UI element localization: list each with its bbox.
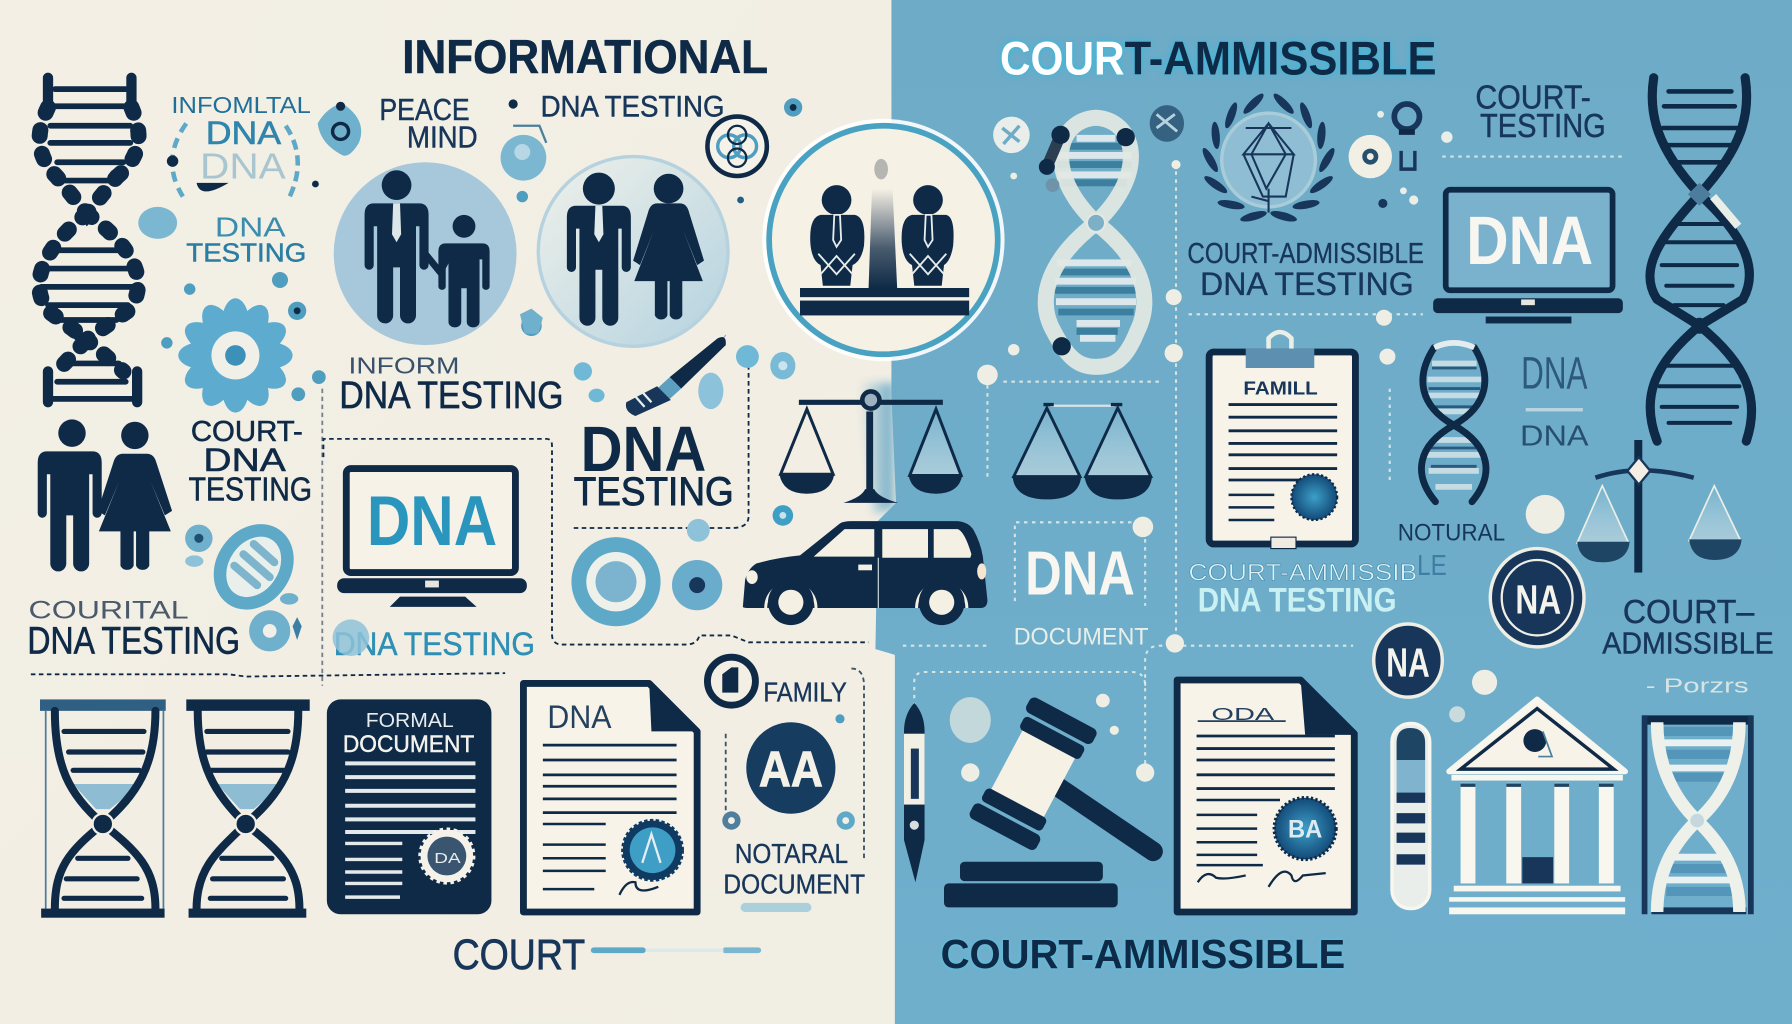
text: court-admissible right: ADMISSIBLE: [1602, 626, 1774, 661]
icon: laptop with DNA: DNA: [1466, 202, 1593, 279]
icon: balance scale right-center: [1013, 405, 1152, 499]
icon: pale DNA helix: [1039, 118, 1144, 367]
text: DNA outline labels: [1520, 348, 1589, 453]
icon: balance scale right: [1577, 440, 1742, 573]
text: DNA document panel: DNA: [1025, 539, 1135, 608]
icon: DNA document: DNA: [547, 699, 612, 735]
connector lines: court-admissible side: [903, 157, 1623, 771]
icon: gavel: [944, 695, 1153, 907]
text: notaral document: [723, 838, 865, 912]
text block: informal DNA testing: INFOMLTAL: [171, 92, 311, 118]
text: DNA outline labels: DNA: [1521, 348, 1588, 399]
icon: molecule badge: [707, 117, 767, 176]
text: court DNA testing: COURT-: [191, 416, 303, 448]
title: court-admissible: T-AMMISSIBLE: [1125, 32, 1437, 84]
text: court testing: COURT-: [1475, 80, 1591, 117]
icon: eye badge: [1349, 104, 1453, 208]
icon: pale hourglass helix right: [1642, 715, 1752, 914]
icon: large DNA helix left: [39, 78, 139, 402]
icon: hourglass helix 2: [186, 699, 310, 918]
text: DNA outline labels: DNA: [1520, 421, 1589, 453]
icon: legal document right: [1177, 679, 1357, 912]
text: court testing: TESTING: [1480, 108, 1606, 145]
text: court-admissible DNA testing: [1187, 238, 1424, 302]
icon: family badge with text: FAMILY: [763, 677, 847, 708]
text: court-admissible DNA testing overlay: COURT-AMMISSIB: [1189, 560, 1417, 587]
text: peace of mind: MIND: [407, 119, 478, 154]
text: DNA testing large: DNA: [581, 413, 706, 485]
icon: monitor with DNA: DNA: [367, 482, 497, 561]
text: courital DNA testing: COURITAL: [29, 596, 189, 624]
text block: informal DNA testing: DNA: [215, 212, 287, 243]
icon: laptop with DNA: [1433, 190, 1623, 323]
text: DNA document panel: [1014, 539, 1149, 651]
icon: blue discs: [571, 505, 793, 626]
text: court-admissible DNA testing: COURT-ADMISSIBLE: [1187, 238, 1424, 270]
text: court testing: [1475, 80, 1606, 145]
icon: AA notary circle: AA: [759, 740, 823, 797]
text block: informal DNA testing: [171, 92, 311, 268]
title: court-ammissible bottom: COURT-AMMISSIBLE: [941, 931, 1345, 977]
title: informational: INFORMATIONAL: [402, 31, 768, 83]
icon: family badge with text: [707, 657, 847, 708]
icon group: blue dots near brush: [574, 345, 795, 409]
icon group: small scattered dots upper left: [138, 98, 802, 401]
text block: informal DNA testing: DNA: [206, 115, 282, 151]
text: inform DNA testing: DNA TESTING: [339, 374, 563, 416]
text: court-admissible right: [1602, 594, 1774, 698]
text: court DNA testing: TESTING: [189, 472, 312, 509]
text: notaral document: DOCUMENT: [723, 869, 865, 900]
text block: informal DNA testing: DNA: [200, 145, 286, 186]
icon: blue mini fragments: [520, 309, 726, 347]
icon: balance scale center: [779, 391, 962, 503]
icon: blue emblem near peace of mind: [318, 102, 361, 156]
background: soft blend behind scale: [859, 383, 894, 514]
text: court-admissible DNA testing: DNA TESTING: [1200, 266, 1414, 302]
text: court-admissible right: - Porzrs: [1646, 675, 1749, 698]
icon: formal document card: FORMAL: [366, 709, 454, 732]
text: inform DNA testing: [339, 353, 563, 416]
icon: blue oval and small discs: [185, 517, 302, 651]
icon: NA badge large: NA: [1515, 577, 1561, 623]
icon: couple circle: [538, 157, 728, 346]
text: court-admissible DNA testing overlay: [1189, 550, 1447, 619]
text: DNA testing large: [574, 413, 734, 514]
background: court-admissible side: [875, 0, 1792, 1024]
icon: NA badge small: [1374, 624, 1442, 697]
text: inform DNA testing: INFORM: [349, 353, 459, 379]
text: courital DNA testing: [27, 596, 240, 662]
text block: informal DNA testing: TESTING: [186, 238, 306, 268]
icon: cream dots and small glyphs on blue: [950, 160, 1565, 782]
icon: blue sphere: [501, 126, 546, 181]
icon: legal document right: BA: [1288, 816, 1322, 844]
icon: small emblem: [1150, 105, 1184, 142]
icon: couple bottom left: [38, 419, 172, 571]
text: notaral document: NOTARAL: [735, 838, 848, 869]
text: peace of mind: PEACE: [379, 92, 470, 127]
title: court-admissible: COUR: [1000, 32, 1125, 84]
text: DNA testing heading: DNA TESTING: [541, 91, 725, 124]
icon: test tube: [1392, 723, 1430, 909]
icon: DNA document: [523, 682, 698, 912]
text: DNA testing large: TESTING: [574, 470, 734, 514]
background: informational side: [0, 0, 914, 1024]
icon: wreath emblem: [1200, 91, 1337, 224]
text: court-admissible DNA testing overlay: DNA TESTING: [1198, 581, 1397, 619]
title: court-admissible: [1000, 32, 1437, 84]
text: court DNA testing: [189, 416, 312, 509]
icon: AA notary circle: [722, 714, 855, 830]
icon: courthouse: [1449, 699, 1625, 914]
icon: blue flower: [178, 298, 293, 413]
icon: legal document right: ODA: [1211, 704, 1275, 724]
icon: car: [743, 521, 987, 625]
text: court with blue dash: [453, 931, 761, 978]
icon: formal document card: DA: [434, 851, 461, 867]
icon: ring of blue fragments around DNA: [167, 123, 298, 200]
icon: hourglass helix 1: [40, 699, 166, 918]
icon: parent and child circle: [334, 162, 517, 345]
icon: clipboard with family document: [1209, 332, 1355, 549]
text: court with blue dash: COURT: [453, 931, 585, 978]
icon: clipboard with family document: FAMILL: [1243, 377, 1318, 398]
icon: formal document card: [327, 699, 491, 914]
text: peace of mind: [379, 92, 478, 154]
text: court-admissible right: COURT–: [1623, 594, 1755, 631]
icon: formal document card: DOCUMENT: [343, 731, 475, 758]
text: notural: NOTURAL: [1398, 520, 1505, 547]
icon: NA badge small: NA: [1386, 640, 1430, 686]
connector lines: informational side: [31, 366, 869, 859]
text: court DNA testing: DNA: [203, 442, 287, 478]
text: court-admissible DNA testing overlay: LE: [1417, 550, 1447, 582]
icon: judges circle: [762, 119, 1005, 361]
icon: paint brush: [626, 337, 726, 416]
icon: large DNA helix right: [1650, 78, 1752, 441]
text: courital DNA testing: DNA TESTING: [27, 620, 240, 662]
icon: small flower right of circle: [993, 117, 1030, 153]
text: blue DNA testing: DNA TESTING: [334, 626, 535, 662]
text: DNA document panel: DOCUMENT: [1014, 624, 1149, 651]
icon: NA badge large: [1490, 549, 1584, 647]
icon: pen: [904, 703, 925, 882]
icon: monitor with DNA: [337, 469, 527, 607]
icon: small DNA helix: [1421, 343, 1486, 502]
